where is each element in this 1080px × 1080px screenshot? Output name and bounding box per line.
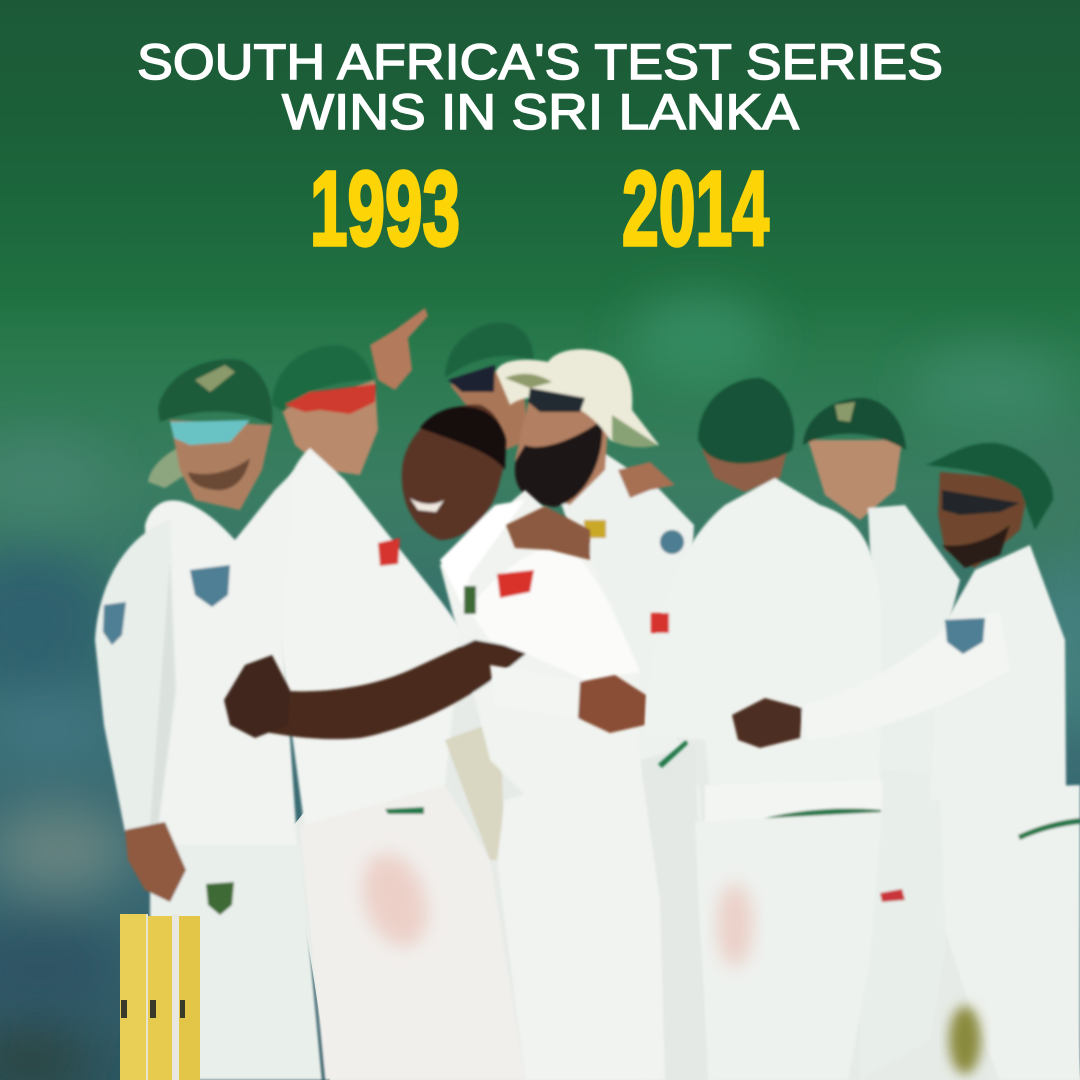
player: left fielder with cap and blue sunglasses bbox=[95, 359, 322, 1080]
collar bbox=[440, 500, 525, 605]
pocket crest bbox=[206, 882, 234, 915]
trousers bbox=[695, 812, 882, 1080]
player: back of group, cap and sunglasses bbox=[445, 323, 533, 450]
player: back-turned fielder bbox=[645, 378, 882, 1080]
face bbox=[808, 440, 902, 520]
stumps bbox=[120, 914, 200, 1080]
cap bbox=[272, 345, 373, 412]
player: du Plessis with red sunglasses bbox=[272, 308, 525, 1080]
player: right fielder with dark glasses bbox=[732, 443, 1080, 1080]
cap bbox=[158, 359, 272, 425]
shirt bbox=[440, 490, 640, 805]
NB logo on sleeve bbox=[651, 613, 669, 633]
shirt bbox=[275, 448, 462, 830]
ground patch, bottom right bbox=[949, 1006, 981, 1074]
trousers bbox=[300, 785, 525, 1080]
white kit base joining the group bbox=[290, 560, 1080, 1080]
hand bbox=[224, 655, 290, 738]
trouser shadow bbox=[640, 745, 708, 1080]
smile bbox=[410, 498, 444, 512]
shirt bbox=[930, 545, 1066, 800]
Amla arm and hand on Rabada shoulder bbox=[585, 530, 655, 640]
cap bbox=[803, 398, 906, 450]
shirt bbox=[145, 470, 298, 855]
neck and face bbox=[170, 420, 272, 510]
beard bbox=[942, 525, 1010, 568]
year: 2014: 2014 bbox=[622, 150, 769, 268]
glasses bbox=[528, 388, 585, 412]
face bbox=[282, 380, 378, 475]
arm around teammate bbox=[255, 640, 530, 739]
sunglasses bbox=[170, 420, 250, 445]
arm bbox=[95, 520, 175, 832]
shirt bbox=[560, 450, 715, 1080]
badge bbox=[584, 520, 606, 538]
head bbox=[702, 440, 790, 492]
trousers bbox=[497, 760, 665, 1080]
stubble bbox=[188, 458, 250, 490]
trousers bbox=[940, 785, 1080, 1080]
NB logo sleeve bbox=[497, 570, 534, 598]
hand on teammate bbox=[732, 698, 802, 748]
chest badge bbox=[945, 618, 985, 654]
green sleeve stripe bbox=[658, 740, 688, 768]
cap bbox=[698, 378, 794, 464]
trouser stain bbox=[717, 883, 753, 967]
back of shirt bbox=[645, 478, 882, 790]
beige trousers behind bbox=[445, 720, 505, 860]
chest badge bbox=[190, 565, 230, 607]
arm bbox=[800, 610, 1010, 740]
head bbox=[402, 405, 505, 540]
trousers bbox=[150, 845, 322, 1080]
collar badge bbox=[464, 586, 476, 614]
title: SOUTH AFRICA'S TEST SERIES bbox=[137, 34, 943, 90]
trouser stain bbox=[352, 845, 438, 955]
player: Rabada celebrating bbox=[224, 405, 665, 1080]
waist stripe bbox=[385, 807, 424, 814]
sunglasses bbox=[285, 384, 376, 414]
face bbox=[515, 395, 610, 505]
sleeve bbox=[468, 545, 640, 680]
face bbox=[938, 472, 1030, 568]
title bbox=[137, 34, 943, 140]
arm shadow bbox=[150, 560, 176, 828]
beard bbox=[515, 420, 602, 507]
year: 1993: 1993 bbox=[310, 150, 460, 268]
glasses bbox=[942, 490, 1020, 515]
raised hand bbox=[370, 308, 428, 390]
hat bbox=[496, 349, 659, 446]
du Plessis arm and hand over Rabada bbox=[490, 506, 655, 733]
hand on shoulder bbox=[618, 462, 675, 498]
NB logo bbox=[378, 538, 400, 566]
player: Quinton de Kock in green cap bbox=[803, 398, 960, 1080]
cap bbox=[926, 443, 1053, 530]
title: WINS IN SRI LANKA bbox=[282, 84, 800, 140]
waistband bbox=[705, 780, 882, 825]
hat brim bbox=[148, 445, 185, 488]
shirt bbox=[868, 505, 960, 780]
player: Amla in sun hat with beard bbox=[496, 349, 715, 1080]
trousers bbox=[860, 770, 945, 1080]
blurred stadium crowd bbox=[0, 295, 1080, 1080]
hand bbox=[125, 822, 186, 902]
